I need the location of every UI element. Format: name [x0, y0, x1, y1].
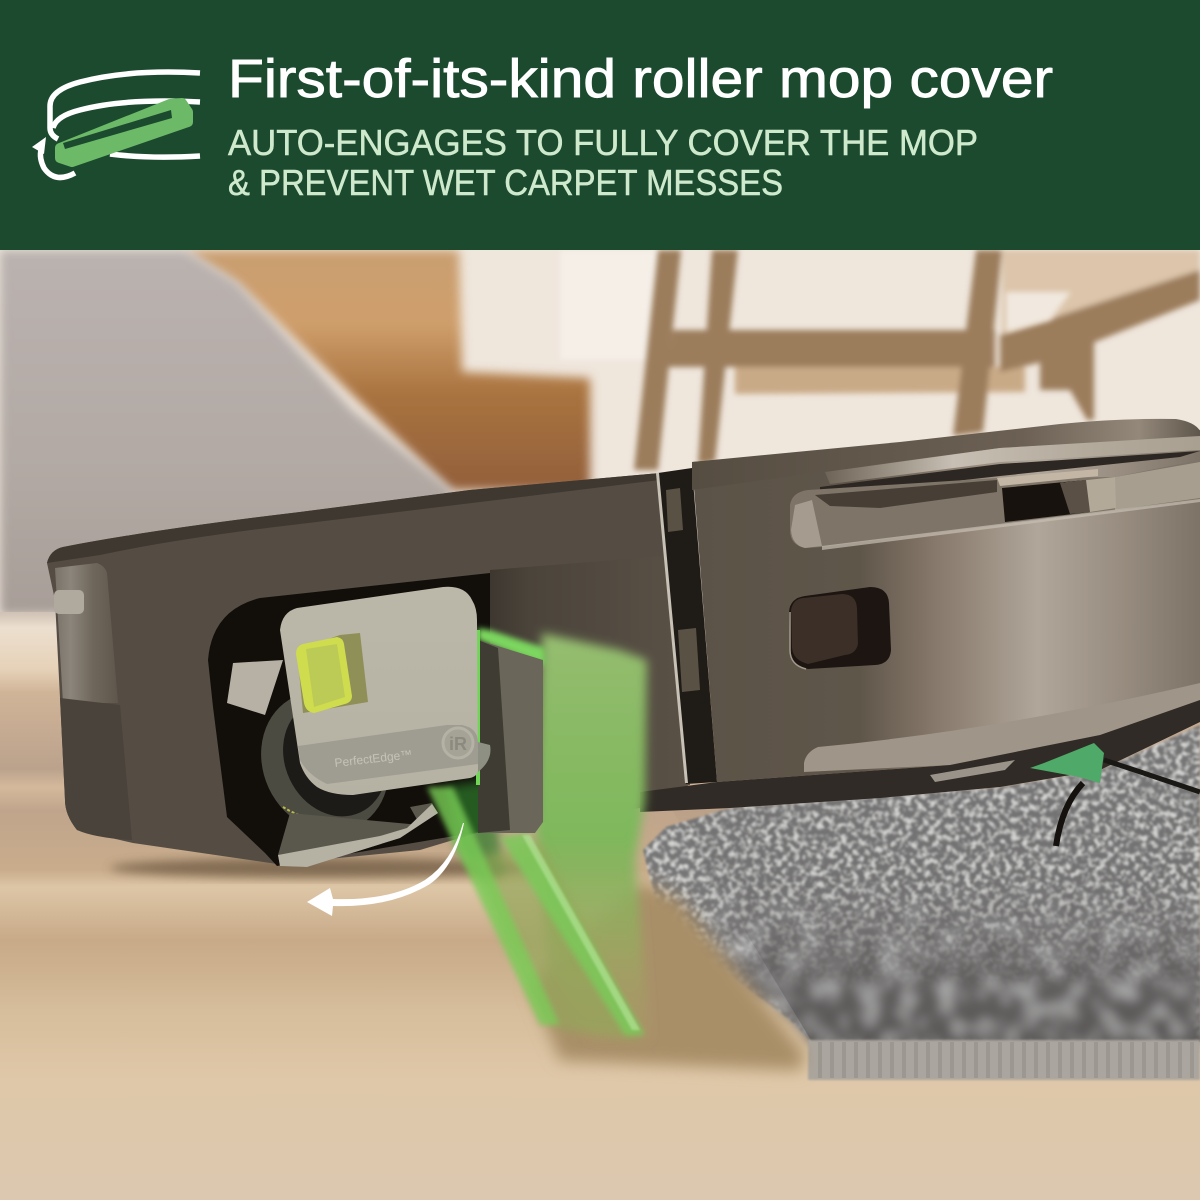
photo: blurred home background [0, 250, 1200, 650]
floor: shadow under robot [110, 858, 530, 878]
mop cover with PerfectEdge label [280, 587, 490, 795]
cover window [296, 633, 368, 713]
cover label strip [298, 725, 478, 784]
beam: main green veil [535, 633, 650, 1040]
title: First-of-its-kind roller mop cover [228, 49, 1053, 109]
robot: light lid lip [825, 436, 1200, 484]
robot: centre body panel [490, 556, 688, 810]
robot: right side panel [692, 420, 1200, 782]
robot: left body [47, 473, 690, 864]
mop roller [227, 660, 412, 853]
rug [643, 725, 1200, 1080]
beam: band between rays [470, 840, 640, 1040]
robot: vent strip [658, 468, 717, 784]
robot: mop cavity [208, 573, 490, 866]
robot: lid shadow [820, 451, 1200, 496]
dark panel beside mop cover [476, 630, 543, 833]
subtitle [228, 122, 978, 203]
mop guard bracket [278, 803, 438, 867]
icon: roller mop cover [32, 72, 200, 177]
subtitle: & PREVENT WET CARPET MESSES [228, 162, 783, 203]
header banner [0, 0, 1200, 250]
subtitle: AUTO-ENGAGES TO FULLY COVER THE MOP [228, 122, 978, 163]
grey wall [0, 250, 470, 615]
side brush [1030, 743, 1200, 846]
beam: top edge glow [478, 628, 545, 666]
beam: right ray [500, 833, 645, 1035]
cover logo [443, 728, 473, 758]
beam: dark green glow [445, 780, 505, 880]
cover logo: iR [449, 734, 467, 754]
arrow: cover opens [307, 823, 464, 916]
floor [0, 612, 1200, 1200]
robot: handle grip [791, 469, 1200, 550]
robot: lower trim [804, 683, 1200, 772]
beam: floor shadow [530, 880, 805, 1070]
robot: vent inserts [666, 488, 700, 692]
beam: left ray [427, 787, 560, 1025]
robot: camera window [789, 587, 891, 669]
robot: lower front cap [60, 698, 132, 840]
robot: top lid [692, 419, 1200, 490]
chair: blurred wooden frame [634, 250, 1200, 470]
rug fringe [808, 1040, 1200, 1080]
rug: blurred front pile [700, 880, 1200, 1045]
robot: silver front cap [54, 563, 118, 703]
staircase wood [185, 250, 590, 490]
robot: handle recess [790, 460, 1200, 548]
cover brand text: PerfectEdge™ [334, 747, 413, 770]
robot: top rim [47, 473, 660, 563]
green light beams [427, 628, 805, 1070]
robot vacuum [47, 419, 1200, 866]
